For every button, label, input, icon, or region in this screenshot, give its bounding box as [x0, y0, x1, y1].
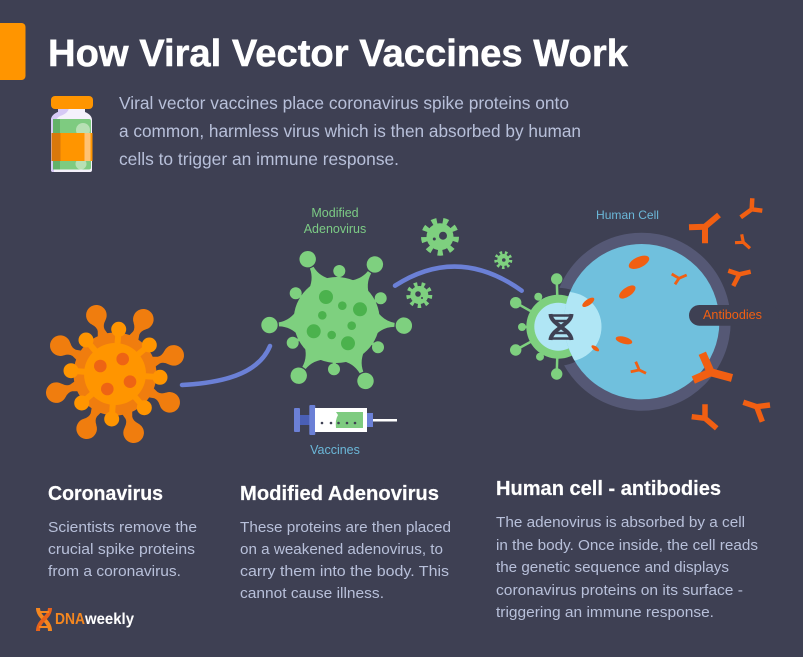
column: human cell - antibodies — [496, 478, 758, 621]
column: human cell - antibodies: The adenovirus is absorbed by a cell — [496, 514, 745, 531]
column: coronavirus: Scientists remove the — [48, 519, 197, 536]
label: modified adenovirus: Modified — [311, 206, 359, 220]
callout: antibodies: Antibodies — [703, 307, 762, 322]
column: modified adenovirus: These proteins are then placed — [240, 519, 451, 536]
human cell with docked adenovirus — [510, 233, 731, 411]
label: human cell: Human Cell — [596, 208, 659, 222]
column: coronavirus: Coronavirus — [48, 483, 163, 505]
orange spike proteins — [581, 253, 651, 353]
icon: vaccine vial — [51, 96, 93, 172]
arrow: coronavirus to adenovirus — [182, 346, 270, 385]
cell membrane — [553, 233, 731, 411]
column: coronavirus: from a coronavirus. — [48, 563, 181, 580]
logo: DNAweekly: DNA — [55, 611, 85, 628]
cell interior — [564, 244, 719, 399]
column: human cell - antibodies: coronavirus proteins on its surface - — [496, 582, 743, 599]
column: human cell - antibodies: triggering an immune response. — [496, 604, 714, 621]
icon: coronavirus — [43, 302, 187, 446]
arrow: adenovirus to human cell — [395, 267, 522, 291]
column: human cell - antibodies: the genetic sequence and displays — [496, 559, 729, 576]
orange title tab — [0, 23, 26, 80]
icon: modified adenovirus — [260, 246, 413, 394]
icon: small virus large — [425, 222, 455, 252]
column: coronavirus — [48, 483, 197, 580]
intro text: a common, harmless virus which is then absorbed by human — [119, 121, 581, 141]
column: modified adenovirus: cannot cause illness. — [240, 585, 384, 602]
column: human cell - antibodies: in the body. Once inside, the cell reads — [496, 537, 758, 554]
absorbed region — [564, 292, 602, 360]
column: modified adenovirus: Modified Adenovirus — [240, 483, 439, 505]
icon: small virus tiny — [496, 253, 510, 267]
callout: antibodies — [689, 305, 779, 326]
logo: DNAweekly — [38, 608, 134, 631]
column: modified adenovirus — [240, 483, 451, 602]
label: vaccines: Vaccines — [310, 443, 360, 457]
column: human cell - antibodies: Human cell - antibodies — [496, 478, 721, 500]
label: modified adenovirus — [304, 206, 366, 236]
intro text: cells to trigger an immune response. — [119, 149, 399, 169]
column: modified adenovirus: on a weakened adenovirus, to — [240, 541, 443, 558]
column: modified adenovirus: carry them into the body. This — [240, 563, 449, 580]
label: modified adenovirus: Adenovirus — [304, 222, 366, 236]
intro text — [119, 93, 581, 169]
title: How Viral Vector Vaccines Work — [48, 33, 629, 75]
antibodies — [631, 198, 770, 428]
icon: small virus medium — [409, 284, 430, 306]
docked adenovirus — [510, 273, 590, 380]
column: coronavirus: crucial spike proteins — [48, 541, 195, 558]
icon: syringe — [294, 405, 397, 435]
logo: DNAweekly: weekly — [84, 611, 134, 628]
membrane notch — [519, 288, 597, 366]
virus core — [534, 303, 582, 351]
icon: DNA helix — [550, 314, 572, 340]
intro text: Viral vector vaccines place coronavirus spike proteins onto — [119, 93, 569, 113]
